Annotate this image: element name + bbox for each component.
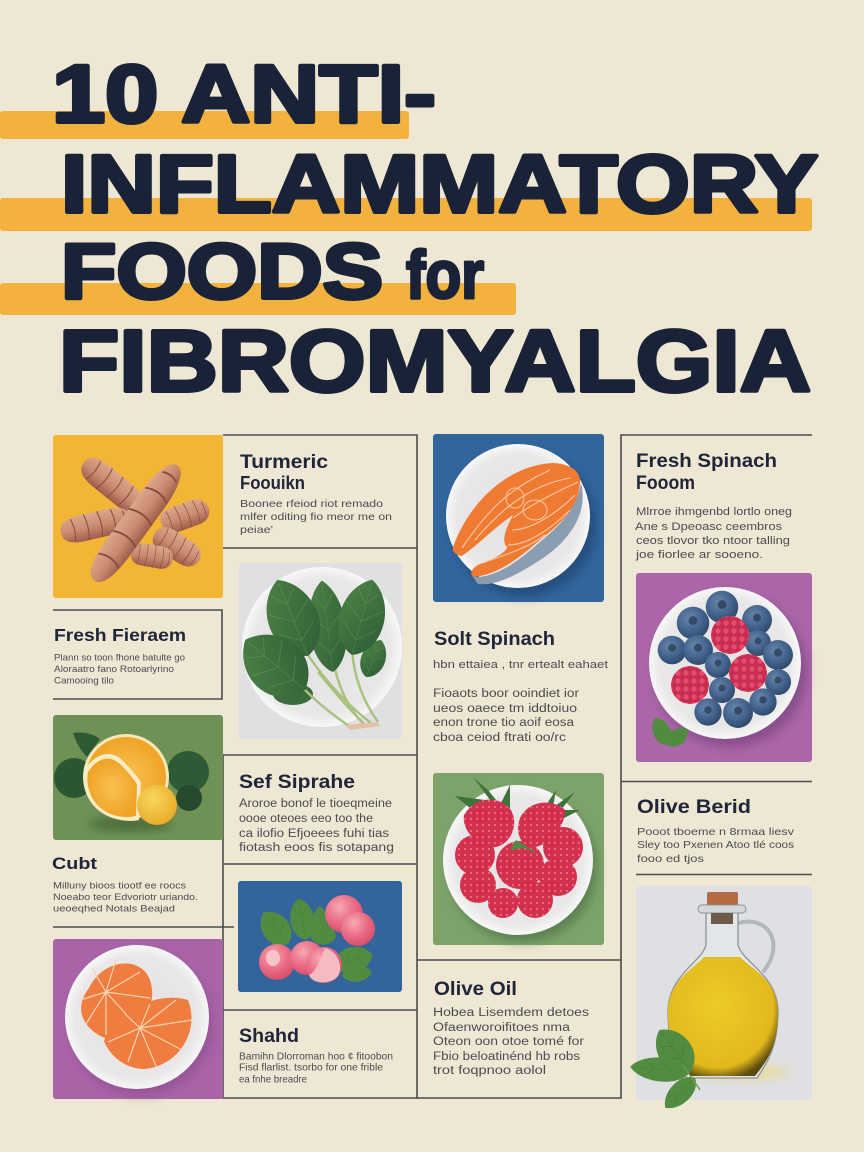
body text: Aroroe bonof le tioeqmeine bbox=[239, 798, 392, 810]
heading: Olive Berid bbox=[637, 797, 751, 818]
body text: Mlrroe ihmgenbd lortlo oneg bbox=[636, 506, 792, 518]
title text bbox=[52, 49, 818, 410]
panel: strawberries image bbox=[433, 773, 604, 945]
body text: Milluny bioos tiootf ee roocs bbox=[53, 880, 186, 892]
body text bbox=[239, 1052, 393, 1086]
body text: Fioaots boor ooindiet ior bbox=[433, 688, 579, 700]
body text: joe fiorlee ar sooeno. bbox=[635, 549, 763, 561]
heading bbox=[636, 450, 777, 494]
panel: sef siprahe bbox=[239, 772, 394, 854]
panel: olive oil bottle image bbox=[629, 886, 812, 1115]
body text: ceos tlovor tko ntoor talling bbox=[636, 535, 790, 547]
subheading: hbn ettaiea , tnr ertealt eahaet bbox=[433, 659, 608, 671]
body text bbox=[637, 826, 795, 865]
title text: FOODS bbox=[61, 227, 383, 315]
body text: enon trone tio aoif eosa bbox=[433, 717, 575, 729]
panel: salmon image bbox=[433, 434, 604, 602]
body text: Hobea Lisemdem detoes bbox=[433, 1007, 589, 1019]
heading: Fooom bbox=[636, 473, 695, 494]
panel: spinach image bbox=[227, 563, 402, 739]
body text bbox=[239, 798, 394, 854]
panel: olive berid bbox=[637, 797, 795, 865]
panel: citrus image bbox=[53, 715, 223, 840]
body text bbox=[635, 506, 792, 561]
body text: oooe oteoes eeo too the bbox=[239, 813, 373, 825]
heading: Solt Spinach bbox=[434, 629, 555, 650]
heading: Cubt bbox=[52, 854, 97, 873]
panel: cubt bbox=[52, 854, 198, 914]
heading: Fresh Spinach bbox=[636, 450, 777, 472]
body text bbox=[433, 1007, 589, 1077]
body text: fooo ed tjos bbox=[637, 853, 704, 865]
heading: Turmeric bbox=[240, 452, 328, 473]
body text: Sley too Pxenen Atoo tlé coos bbox=[637, 839, 794, 851]
body text: ueos oaece tm iddtoiuo bbox=[433, 703, 577, 715]
title text: 10 ANTI- bbox=[52, 49, 436, 140]
yellow highlight bars bbox=[0, 111, 812, 315]
body text: Bamihn Dlorroman hoo ¢ fitoobon bbox=[239, 1052, 393, 1062]
body text: Aloraatro fano Rotoarlyrino bbox=[54, 664, 174, 675]
body text: ea fnhe breadre bbox=[239, 1074, 307, 1086]
body text: Plann so toon fhone batulte go bbox=[54, 652, 185, 664]
panel: fresh spinach fooom bbox=[635, 450, 792, 561]
body text: trot foqpnoo aolol bbox=[433, 1065, 546, 1077]
panel: olive oil bbox=[433, 979, 589, 1077]
panel: turmeric bbox=[53, 435, 392, 598]
panel: solt spinach bbox=[433, 629, 608, 744]
title text: INFLAMMATORY bbox=[61, 139, 818, 230]
body text: Ane s Dpeoasc ceembros bbox=[635, 521, 783, 533]
body text: mlfer oditing fio meor me on bbox=[240, 511, 392, 523]
body text bbox=[54, 652, 185, 686]
body text: Boonee rfeiod riot remado bbox=[240, 498, 383, 510]
body text: ueoeqhed Notals Beajad bbox=[53, 904, 175, 914]
heading: Foouikn bbox=[240, 473, 305, 493]
body text: Noeabo teor Edvoriotr uriando. bbox=[53, 892, 198, 903]
body text: Pooot tboeme n 8rmaa liesv bbox=[637, 826, 795, 838]
panel: pink fruit image bbox=[238, 881, 402, 992]
panel: shahd bbox=[239, 1026, 393, 1086]
body text: Ofaenworoifitoes nma bbox=[433, 1022, 571, 1034]
body text bbox=[433, 688, 579, 744]
heading bbox=[240, 452, 328, 493]
body text: fiotash eoos fis sotapang bbox=[239, 842, 394, 854]
panel: tangerine image bbox=[53, 939, 223, 1099]
panel: fresh fieraem bbox=[54, 625, 186, 686]
title text: for bbox=[406, 237, 484, 313]
panel: berries image bbox=[636, 573, 812, 762]
body text: ca ilofio Efjoeees fuhi tias bbox=[239, 828, 389, 840]
body text: Oteon oon otoe tomé for bbox=[433, 1036, 584, 1048]
heading: Olive Oil bbox=[434, 979, 517, 1000]
body text: cboa ceiod ftrati oo/rc bbox=[433, 732, 566, 744]
title with yellow highlights bbox=[0, 49, 818, 410]
title text: FIBROMYALGIA bbox=[59, 313, 811, 410]
body text: Fbio beloatinénd hb robs bbox=[433, 1051, 580, 1063]
heading: Sef Siprahe bbox=[239, 772, 355, 793]
body text bbox=[240, 498, 392, 536]
body text bbox=[53, 880, 198, 914]
heading: Fresh Fieraem bbox=[54, 625, 186, 645]
body text: Camooing tilo bbox=[54, 676, 114, 686]
body text: Fisd flarlist. tsorbo for one frible bbox=[239, 1062, 383, 1074]
body text: peiae' bbox=[240, 524, 273, 536]
heading: Shahd bbox=[239, 1026, 299, 1047]
image: turmeric roots bbox=[53, 435, 223, 598]
